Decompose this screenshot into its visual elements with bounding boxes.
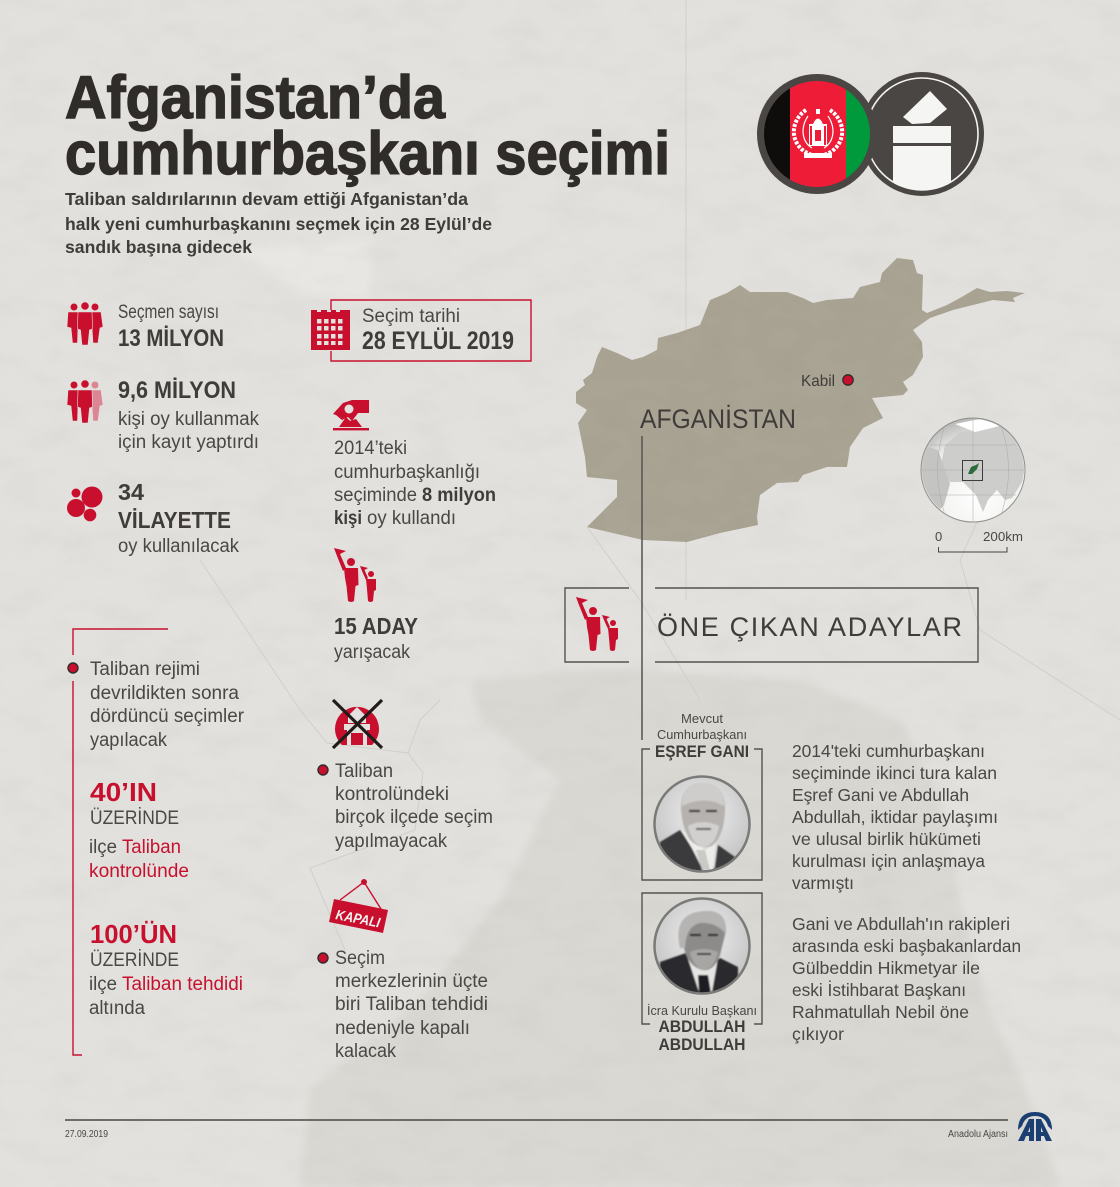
text: 2014 turnout: cumhurbaşkanlığı (334, 462, 480, 483)
text: provinces: 34 (118, 479, 144, 505)
icon: calendar (311, 310, 350, 350)
icon: crossed polling station (333, 700, 382, 748)
text: 2014 turnout: oy kullandı (367, 508, 456, 529)
subtitle: halk yeni cumhurbaşkanını seçmek için 28 Eylül’de (65, 214, 492, 234)
label: Kabul (801, 373, 853, 390)
text: over 40 districts: Taliban (122, 837, 181, 858)
icon: hand voting (333, 400, 369, 430)
text: closed centres: nedeniyle kapalı (335, 1018, 470, 1039)
text: fourth election (90, 659, 245, 751)
label: Kabul: Kabil (801, 373, 835, 390)
footer (65, 1112, 1052, 1141)
text: fourth election: dördüncü seçimler (90, 706, 245, 727)
text: power sharing background: kurulması için anlaşmaya (792, 851, 985, 871)
text: fourth election: yapılacak (90, 730, 167, 751)
panel: election date: Seçim tarihi (362, 306, 460, 327)
text: power sharing background: Eşref Gani ve Abdullah (792, 785, 969, 805)
text: 2014 turnout: seçiminde (334, 485, 417, 506)
text: power sharing background: Abdullah, iktidar paylaşımı (792, 807, 998, 827)
subtitle: Taliban saldırılarının devam ettiği Afganistan’da (65, 189, 468, 209)
portrait: Ghani (654, 776, 750, 885)
text: voter count: 13 MİLYON (118, 325, 224, 352)
text: 2014 turnout: kişi (334, 508, 362, 529)
connector line (641, 436, 643, 740)
icon: closed sign (329, 879, 388, 933)
panel: featured candidates heading (565, 588, 978, 662)
text: power sharing background: 2014'teki cumhurbaşkanı (792, 741, 985, 761)
label: country name: AFGANİSTAN (640, 403, 796, 434)
text: over 40 districts: ÜZERİNDE (90, 808, 179, 829)
panel: Taliban control (68, 629, 245, 1055)
text: closed centres (318, 948, 488, 1062)
text: closed centres: kalacak (335, 1041, 396, 1062)
text: closed centres: biri Taliban tehdidi (335, 994, 488, 1015)
text: rivals: çıkıyor (792, 1024, 844, 1044)
text: fourth election: devrildikten sonra (90, 683, 239, 704)
icon: locator globe (921, 418, 1030, 522)
text: no voting in districts: kontrolündeki (335, 784, 449, 805)
text: rivals: arasında eski başbakanlardan (792, 936, 1021, 956)
text: 2014 turnout: 2014’teki (334, 438, 407, 459)
text: 2014 turnout: 8 milyon (422, 485, 496, 506)
text: over 100 districts: ÜZERİNDE (90, 950, 179, 971)
text: fourth election: Taliban rejimi (90, 659, 200, 680)
scale bar: 200km (983, 529, 1023, 544)
icon: candidates small (576, 597, 618, 651)
panel: candidate Ghani: Mevcut (681, 711, 723, 726)
text: 15 candidates: 15 ADAY (334, 613, 418, 639)
icon: registered voters (67, 380, 103, 423)
icon: provinces circles (67, 486, 102, 521)
title: cumhurbaşkanı seçimi (65, 120, 670, 187)
subtitle: sandık başına gidecek (65, 237, 252, 257)
panel: election date (311, 300, 531, 361)
text: rivals: Rahmatullah Nebil öne (792, 1002, 969, 1022)
text: power sharing background: varmıştı (792, 873, 854, 893)
text: over 100 districts: ilçe (89, 974, 117, 995)
text: 15 candidates: yarışacak (334, 642, 410, 663)
text: over 40 districts: ilçe (89, 837, 117, 858)
bullet (68, 663, 78, 673)
panel: candidate Abdullah: İcra Kurulu Başkanı (647, 1003, 757, 1018)
panel: candidate Abdullah (642, 893, 762, 1054)
panel: candidate Ghani (642, 711, 762, 885)
text: closed centres: merkezlerinin üçte (335, 971, 488, 992)
text: power sharing background (792, 741, 998, 893)
panel: candidate Abdullah: ABDULLAH (658, 1017, 746, 1036)
icon: candidates (334, 548, 376, 602)
portrait: Abdullah (654, 898, 750, 1000)
text: no voting in districts (318, 761, 493, 852)
panel: candidate Abdullah: ABDULLAH (658, 1035, 746, 1054)
text: power sharing background: seçiminde ikinci tura kalan (792, 763, 997, 783)
text: no voting in districts: Taliban (335, 761, 393, 782)
text: registered count: kişi oy kullanmak (118, 409, 259, 430)
scale bar (935, 529, 1023, 552)
text: rivals: eski İstihbarat Başkanı (792, 980, 966, 1000)
text: provinces: oy kullanılacak (118, 536, 239, 557)
text: rivals (792, 914, 1021, 1044)
text: registered count (118, 377, 259, 453)
text: registered count: 9,6 MİLYON (118, 377, 236, 404)
text: voter count (118, 302, 224, 352)
icon: closed sign: KAPALI (334, 906, 383, 931)
text: no voting in districts: birçok ilçede seçim (335, 807, 493, 828)
icon: ballot box badge (860, 72, 984, 196)
panel: voter statistics (67, 302, 103, 345)
text: 15 candidates (334, 613, 418, 663)
text: registered count: için kayıt yaptırdı (118, 432, 259, 453)
text: over 40 districts (89, 777, 189, 882)
text: 2014 turnout (334, 438, 496, 529)
text: over 100 districts: altında (89, 998, 145, 1019)
panel: featured candidates heading: ÖNE ÇIKAN ADAYLAR (657, 612, 962, 642)
text: over 40 districts: kontrolünde (89, 861, 189, 882)
date: 27.09.2019 (65, 1129, 108, 1140)
text: over 100 districts (89, 919, 243, 1019)
subtitle (65, 189, 492, 257)
icon: three voters (67, 302, 103, 345)
text: rivals: Gani ve Abdullah'ın rakipleri (792, 914, 1010, 934)
panel: candidate Ghani: EŞREF GANI (655, 742, 749, 761)
text: provinces (118, 479, 239, 557)
icon: Anadolu Agency logo (1018, 1112, 1052, 1141)
text: provinces: VİLAYETTE (118, 507, 231, 533)
text: power sharing background: ve ulusal birlik hükümeti (792, 829, 981, 849)
text: rivals: Gülbeddin Hikmetyar ile (792, 958, 980, 978)
icon: Afghan flag badge (757, 74, 877, 194)
panel: candidate Ghani: Cumhurbaşkanı (657, 727, 747, 742)
text: voter count: Seçmen sayısı (118, 302, 219, 323)
panel: election date: 28 EYLÜL 2019 (362, 326, 514, 355)
text: closed centres: Seçim (335, 948, 385, 969)
map: Afghanistan (570, 250, 1030, 550)
text: over 40 districts: 40’IN (90, 777, 157, 807)
credit: Anadolu Ajansı (948, 1129, 1008, 1140)
title (65, 64, 670, 187)
text: over 100 districts: 100’ÜN (90, 919, 177, 949)
title: Afganistan’da (65, 64, 446, 131)
text: no voting in districts: yapılmayacak (335, 831, 447, 852)
text: over 100 districts: Taliban tehdidi (122, 974, 243, 995)
scale bar: 0 (935, 529, 942, 544)
